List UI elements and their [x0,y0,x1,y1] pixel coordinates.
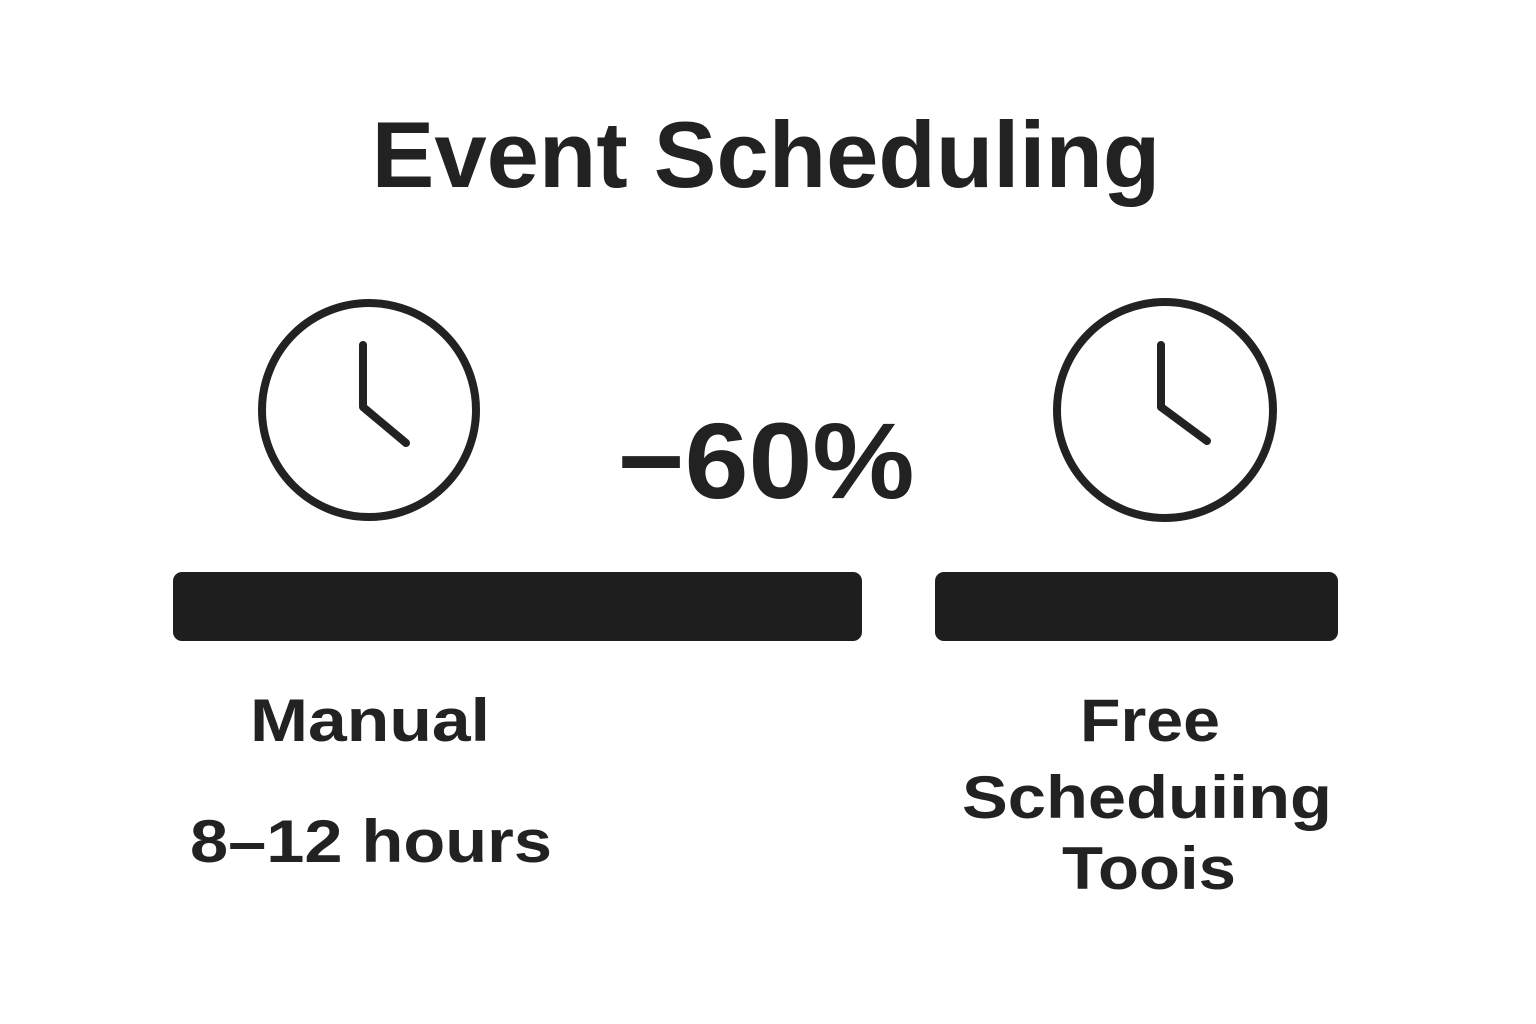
label: free scheduling tools [962,687,1332,902]
label: free scheduling tools: Free [1080,687,1220,754]
label: manual: Manual [250,687,490,754]
label: free scheduling tools: Toois [1062,835,1236,902]
bar: free tools [935,572,1338,641]
label: free scheduling tools: Scheduiing [962,764,1332,831]
icon: left clock [262,303,476,517]
label: manual [190,687,552,875]
icon: right clock [1057,302,1273,518]
stat: reduction: −60% [618,400,914,521]
bar: manual [173,572,862,641]
title: Event Scheduling [372,102,1160,207]
label: manual: 8–12 hours [190,808,552,875]
